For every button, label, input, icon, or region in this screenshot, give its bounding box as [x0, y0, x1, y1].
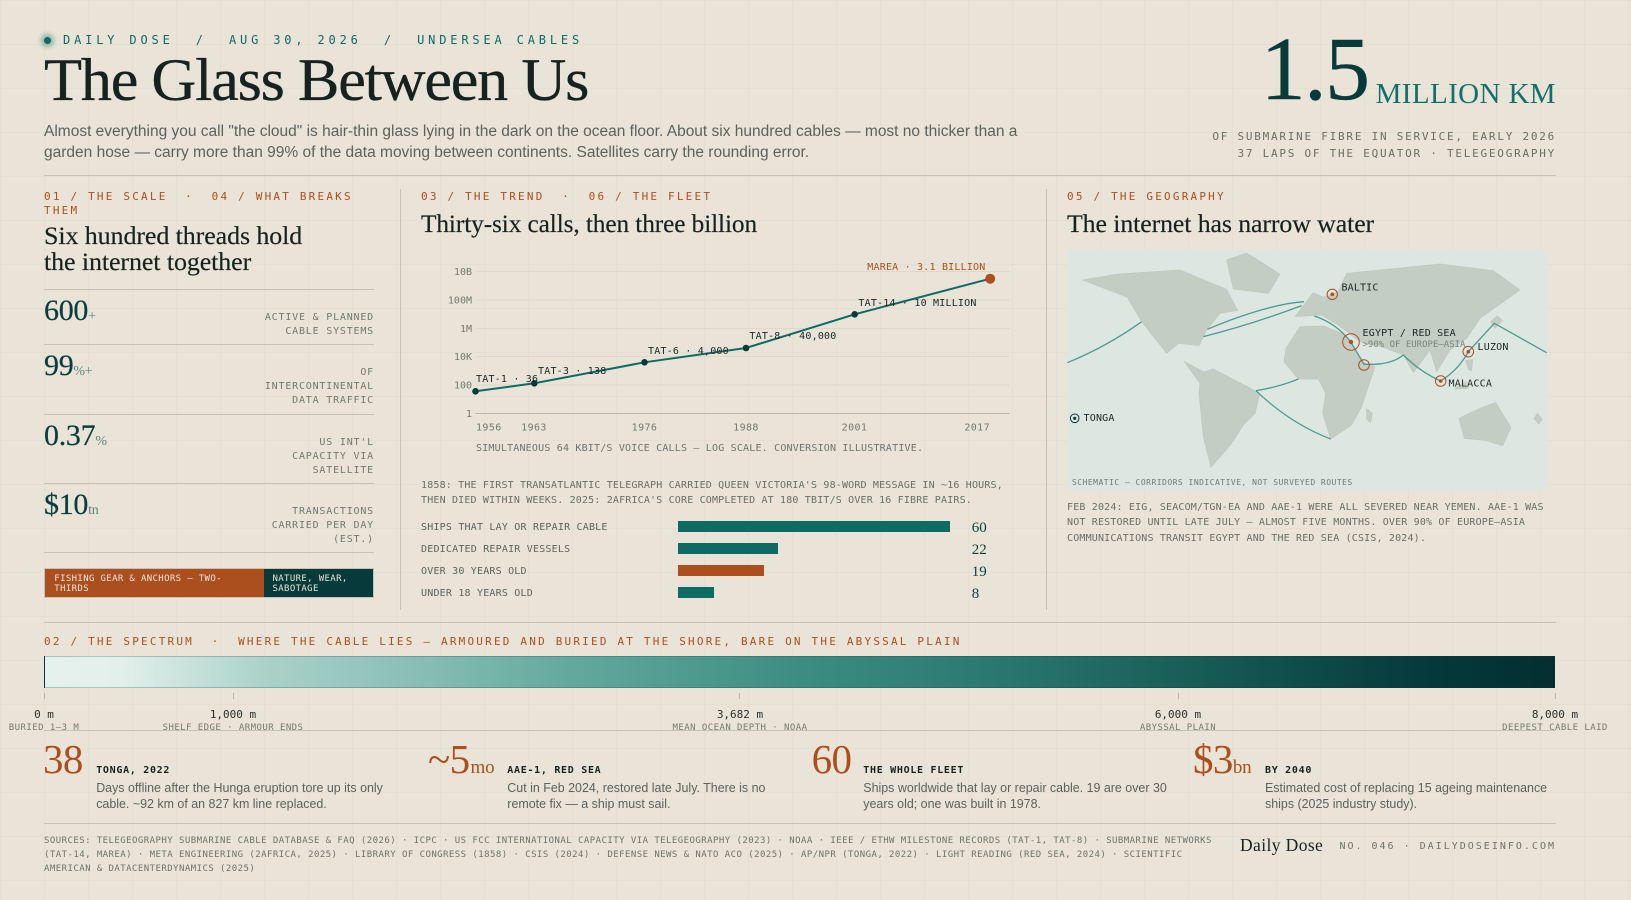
stat: 99%+ of data traffic: INTERCONTINENTAL	[265, 380, 374, 392]
callout text: Days offline after the Hunga eruption tore up its only	[96, 781, 383, 795]
x axis labels: 1976	[632, 422, 657, 434]
stat: 0.37% via satellite: CAPACITY VIA	[292, 450, 374, 462]
issue line: NO. 046 · DAILYDOSEINFO.COM	[1339, 841, 1556, 852]
bar chart: the fleet	[421, 520, 987, 602]
panel: the depth spectrum	[9, 634, 1608, 733]
stat: $10tn transactions	[44, 483, 374, 552]
y axis labels: 1M	[460, 324, 472, 335]
stat: 600+ cable systems: 600+	[44, 294, 96, 326]
callout text: years old; one was built in 1978.	[863, 797, 1041, 811]
number: 60: 60	[812, 736, 851, 782]
panel: the scale and what breaks them	[44, 190, 374, 598]
marker: Malacca: MALACCA	[1448, 379, 1492, 390]
marker: Luzon	[1463, 342, 1509, 357]
sources: SOURCES: TELEGEOGRAPHY SUBMARINE CABLE DATABASE & FAQ (2026) · ICPC · US FCC INTERNATIONAL CAPACITY VIA TELEGEOGRAPHY (2023) · NOAA · IEEE / ETHW MILESTONE RECORDS (TAT-1, TAT-8) · SUBMARINE NETWORKS	[44, 836, 1212, 846]
brand name: Daily Dose	[1240, 835, 1323, 855]
callout heading: AAE-1, RED SEA	[507, 764, 601, 776]
marker: Tonga: TONGA	[1084, 413, 1115, 424]
bar: ships that lay or repair cable, 60: 60	[972, 520, 987, 536]
chart footnote: SIMULTANEOUS 64 KBIT/S VOICE CALLS — LOG SCALE. CONVERSION ILLUSTRATIVE.	[476, 443, 923, 454]
callout: $3bn by 2040	[1193, 736, 1547, 811]
bar: under 18 years old, 8: 8	[972, 586, 979, 602]
stat: 600+ cable systems: ACTIVE & PLANNED	[265, 312, 374, 322]
depth tick: 8,000 m: 8,000 m	[1532, 708, 1578, 720]
callout text	[96, 781, 383, 811]
panel heading: the internet together	[44, 249, 251, 276]
world map schematic	[1067, 250, 1547, 490]
headline stat: 1.5 million km: 1.5MILLION KM	[1261, 20, 1556, 119]
map caption: SCHEMATIC — CORRIDORS INDICATIVE, NOT SURVEYED ROUTES	[1072, 478, 1353, 487]
stacked bar: causes of cable breaks	[44, 568, 374, 598]
bar: dedicated repair vessels, 22: DEDICATED REPAIR VESSELS	[421, 544, 570, 554]
number: $3bn: $3bn	[1193, 736, 1251, 782]
depth tick: 0 m	[9, 708, 79, 733]
callout heading: BY 2040	[1265, 764, 1312, 776]
marker: Egypt / Red Sea: EGYPT / RED SEA	[1362, 328, 1456, 339]
callout text: Estimated cost of replacing 15 ageing maintenance	[1265, 781, 1547, 795]
depth tick: 6,000 m: ABYSSAL PLAIN	[1140, 723, 1216, 733]
depth tick: 1,000 m: SHELF EDGE · ARMOUR ENDS	[163, 723, 303, 733]
Eurasia and Asian islands	[1295, 264, 1520, 389]
sources	[44, 836, 1212, 874]
callout text: Ships worldwide that lay or repair cable. 19 are over 30	[863, 781, 1167, 795]
footer brand	[1240, 835, 1556, 855]
callout text	[1265, 781, 1547, 811]
section label: 03 / THE TREND · 06 / THE FLEET	[421, 190, 712, 202]
geography note: COMMUNICATIONS TRANSIT EGYPT AND THE RED SEA (CSIS, 2024).	[1067, 533, 1426, 544]
panel: the geography	[1067, 190, 1547, 544]
callout row	[43, 736, 1547, 811]
stat: 0.37% via satellite: US INT'L	[319, 436, 374, 448]
telegraph note: THEN DIED WITHIN WEEKS. 2025: 2AFRICA'S CORE COMPLETED AT 180 TBIT/S OVER 16 FIBRE PAIRS.	[421, 495, 972, 506]
panel heading	[44, 223, 302, 276]
stat: 99%+ of data traffic: OF	[360, 366, 374, 378]
data labels: TAT-14 · 10 MILLION	[858, 298, 977, 309]
panel heading: Six hundred threads hold	[44, 223, 302, 250]
marker: Luzon: LUZON	[1478, 342, 1509, 353]
y axis labels: 10K	[454, 352, 472, 363]
endpoint marker: MAREA	[985, 274, 995, 284]
x axis labels: 2001	[842, 422, 867, 434]
x axis labels	[476, 422, 990, 434]
geography note: NOT RESTORED UNTIL LATE JULY — ALMOST FIVE MONTHS. OVER 90% OF EUROPE–ASIA	[1067, 517, 1525, 528]
stat: 0.37% via satellite: 0.37%	[44, 418, 107, 452]
stat: 99%+ of data traffic	[44, 344, 374, 414]
intro text	[44, 123, 1018, 161]
x axis labels: 1956	[476, 422, 502, 434]
data labels: TAT-8 · 40,000	[749, 331, 836, 342]
segment: nature, wear, sabotage	[264, 569, 373, 597]
segment: fishing gear and anchors: FISHING GEAR & ANCHORS — TWO-	[54, 574, 222, 584]
callout text	[863, 781, 1167, 811]
depth tick: 1,000 m	[163, 708, 303, 733]
bar: over 30 years old, 19: 19	[972, 564, 987, 580]
callout heading: TONGA, 2022	[96, 764, 170, 776]
callout text: Cut in Feb 2024, restored late July. There is no	[507, 781, 765, 795]
title: The Glass Between Us	[44, 47, 588, 113]
depth tick: 8,000 m	[1502, 708, 1608, 733]
x axis labels: 1988	[733, 422, 759, 434]
callout: the whole fleet	[812, 736, 1167, 811]
depth tick: 6,000 m: 6,000 m	[1155, 708, 1201, 720]
stat: $10tn transactions: TRANSACTIONS	[292, 506, 374, 516]
depth tick: 1,000 m: 1,000 m	[210, 708, 256, 720]
panel: the trend and the fleet	[421, 190, 1010, 602]
stat: 600+ cable systems: CABLE SYSTEMS	[285, 326, 374, 336]
data labels	[476, 262, 986, 385]
stat: $10tn transactions: (EST.)	[333, 534, 374, 544]
segment: nature, wear, sabotage: SABOTAGE	[272, 584, 319, 594]
masthead header	[38, 20, 1556, 161]
bar: under 18 years old, 8: UNDER 18 YEARS OLD	[421, 588, 533, 598]
depth gradient bar	[44, 656, 1555, 688]
bar: ships that lay or repair cable, 60	[421, 520, 987, 536]
marker: Egypt / Red Sea: >90% OF EUROPE–ASIA	[1362, 340, 1466, 350]
section label: 05 / THE GEOGRAPHY	[1067, 190, 1226, 202]
telegraph note: 1858: THE FIRST TRANSATLANTIC TELEGRAPH CARRIED QUEEN VICTORIA'S 98-WORD MESSAGE IN ~16 HOURS,	[421, 480, 1003, 491]
intro text: Almost everything you call "the cloud" is hair-thin glass lying in the dark on the ocean floor. About six hundred cables — most no thicker than a	[44, 123, 1017, 140]
sources: AMERICAN & DATACENTERDYNAMICS (2025)	[44, 864, 255, 874]
bar: dedicated repair vessels, 22: 22	[972, 542, 987, 558]
y axis labels	[448, 267, 472, 420]
geography note	[1067, 502, 1544, 544]
headline stat caption: OF SUBMARINE FIBRE IN SERVICE, EARLY 2026	[1212, 130, 1556, 143]
stat: $10tn transactions: $10tn	[44, 488, 98, 520]
bar: dedicated repair vessels, 22	[421, 542, 987, 558]
y axis labels: 10B	[454, 267, 472, 278]
panel heading: The internet has narrow water	[1067, 211, 1374, 238]
line chart: voice calls per cable	[448, 262, 1010, 454]
data labels: MAREA · 3.1 BILLION	[867, 262, 986, 273]
data labels: TAT-6 · 4,000	[648, 346, 729, 357]
telegraph note	[421, 480, 1003, 506]
segment: fishing gear and anchors: THIRDS	[54, 584, 89, 594]
y axis labels: 1	[466, 409, 472, 420]
headline stat caption	[1212, 130, 1556, 160]
data points	[472, 311, 858, 395]
stat: 99%+ of data traffic: DATA TRAFFIC	[292, 394, 374, 406]
continents	[1083, 253, 1542, 467]
marker: Egypt / Red Sea	[1343, 328, 1466, 350]
stat: 0.37% via satellite	[44, 414, 374, 483]
depth tick: 3,682 m	[672, 708, 807, 733]
intro text: garden hose — carry more than 99% of the data moving between continents. Satellites carry the rounding error.	[44, 144, 809, 161]
callout text: remote fix — a ship must sail.	[507, 797, 670, 811]
segment: nature, wear, sabotage: NATURE, WEAR,	[272, 574, 348, 584]
bar: over 30 years old, 19	[421, 564, 987, 580]
callout text	[507, 781, 765, 811]
headline stat caption: 37 LAPS OF THE EQUATOR · TELEGEOGRAPHY	[1237, 147, 1556, 160]
data labels: TAT-3 · 138	[538, 366, 606, 377]
depth tick: 3,682 m: 3,682 m	[717, 708, 763, 720]
callout: Tonga 2022	[43, 736, 383, 811]
depth tick: 0 m: BURIED 1–3 M	[9, 723, 79, 733]
segment: fishing gear and anchors	[45, 569, 264, 597]
number: ~5 months: ~5mo	[428, 736, 494, 782]
y axis labels: 100M	[448, 296, 472, 306]
number: 38: 38	[43, 736, 83, 782]
stat: 600+ cable systems	[44, 289, 374, 344]
x axis labels: 1963	[521, 422, 547, 434]
stat: $10tn transactions: CARRIED PER DAY	[272, 520, 374, 530]
stat: 99%+ of data traffic: 99%+	[44, 348, 92, 382]
x axis labels: 2017	[964, 422, 990, 434]
callout heading: THE WHOLE FLEET	[863, 764, 964, 776]
callout text: cable. ~92 km of an 827 km line replaced.	[96, 797, 327, 811]
marker: Bab el-Mandeb	[1359, 360, 1369, 370]
callout: AAE-1 Red Sea	[428, 736, 765, 811]
eyebrow with status dot: DAILY DOSE / AUG 30, 2026 / UNDERSEA CABLES	[63, 33, 583, 47]
depth tick: 0 m: 0 m	[34, 708, 54, 720]
depth tick: 8,000 m: DEEPEST CABLE LAID	[1502, 723, 1608, 733]
marker: Baltic	[1327, 282, 1379, 299]
panel heading: Thirty-six calls, then three billion	[421, 211, 757, 238]
callout text: ships (2025 industry study).	[1265, 797, 1417, 811]
data labels: TAT-1 · 36	[476, 374, 538, 385]
depth tick: 3,682 m: MEAN OCEAN DEPTH · NOAA	[672, 723, 807, 733]
bar: ships that lay or repair cable, 60: SHIPS THAT LAY OR REPAIR CABLE	[421, 522, 608, 532]
section label: 02 / THE SPECTRUM · WHERE THE CABLE LIES — ARMOURED AND BURIED AT THE SHORE, BARE ON THE ABYSSAL PLAIN	[44, 634, 962, 648]
sources: (TAT-14, MAREA) · META ENGINEERING (2AFRICA, 2025) · LIBRARY OF CONGRESS (1858) · CSIS (2024) · DEFENSE NEWS & NATO ACO (2025) · AP/NPR (TONGA, 2022) · LIGHT READING (RED SEA, 2024) · SCIENTIFIC	[44, 850, 1182, 860]
trend line	[476, 279, 990, 391]
stat: 0.37% via satellite: SATELLITE	[313, 464, 374, 476]
cable routes	[1067, 302, 1547, 439]
bar: under 18 years old, 8	[421, 586, 979, 602]
depth tick: 6,000 m	[1140, 708, 1216, 733]
geography note: FEB 2024: EIG, SEACOM/TGN-EA AND AAE-1 WERE ALL SEVERED NEAR YEMEN. AAE-1 WAS	[1067, 502, 1544, 513]
marker: Malacca	[1435, 376, 1492, 390]
y axis labels: 100	[454, 380, 472, 392]
marker: Baltic: BALTIC	[1342, 282, 1379, 294]
section label: 01 / THE SCALE · 04 / WHAT BREAKS THEM	[44, 190, 353, 216]
bar: over 30 years old, 19: OVER 30 YEARS OLD	[421, 566, 527, 576]
